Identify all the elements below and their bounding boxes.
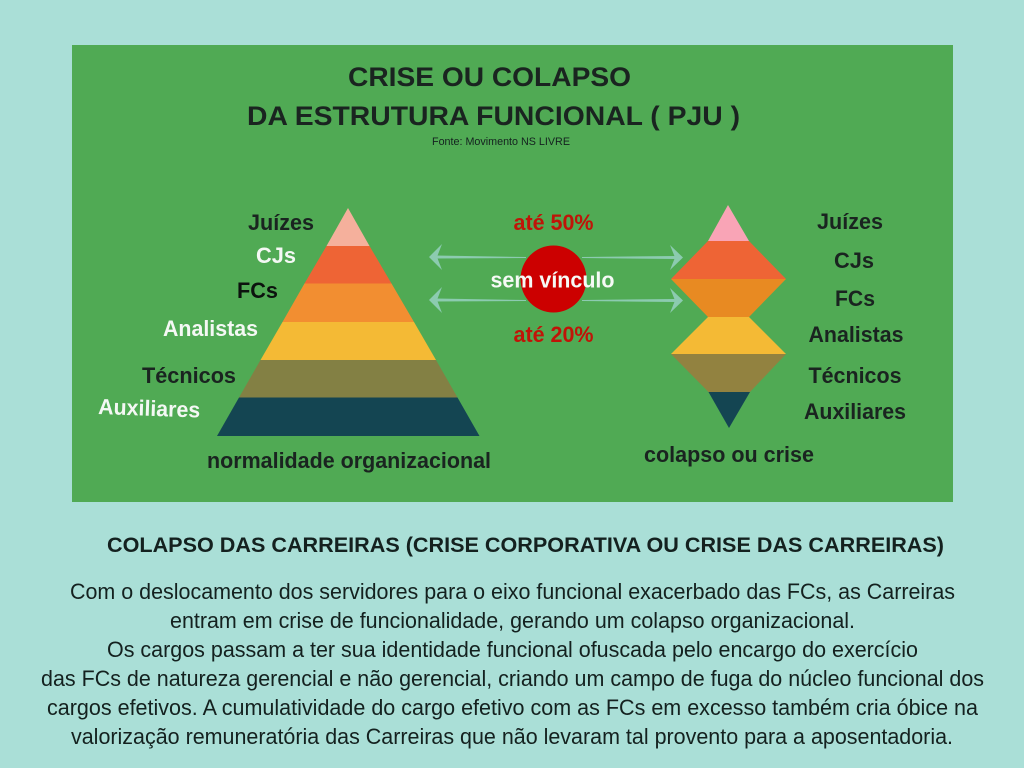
diamond labels [804, 209, 906, 424]
body text: Com o deslocamento dos servidores para o eixo funcional exacerbado das FCs, as Carreiras [70, 579, 955, 604]
body text: entram em crise de funcionalidade, gerando um colapso organizacional. [170, 608, 855, 633]
body text: Os cargos passam a ter sua identidade funcional ofuscada pelo encargo do exercício [107, 637, 918, 662]
chart: normal pyramid [217, 208, 480, 436]
diamond labels: Juízes [817, 209, 883, 234]
body text: cargos efetivos. A cumulatividade do cargo efetivo com as FCs em excesso também cria óbice na [47, 695, 979, 720]
title: CRISE OU COLAPSO [348, 62, 631, 92]
pyramid labels: Técnicos [142, 363, 236, 388]
body text: valorização remuneratória das Carreiras que não levaram tal provento para a aposentadoria. [71, 724, 953, 749]
source note: Fonte: Movimento NS LIVRE [432, 136, 570, 148]
label: sem vínculo: sem vínculo [490, 268, 614, 292]
body text: das FCs de natureza gerencial e não gerencial, criando um campo de fuga do núcleo funcional dos [41, 666, 984, 691]
diamond labels: Auxiliares [804, 399, 906, 424]
diamond labels: Analistas [808, 322, 904, 347]
body text [41, 579, 984, 749]
diamond caption: colapso ou crise [644, 442, 814, 467]
pyramid labels [98, 210, 314, 423]
diamond labels: FCs [835, 286, 875, 311]
diamond labels: CJs [834, 248, 874, 273]
label: até 20%: até 20% [514, 322, 594, 347]
title [247, 62, 740, 131]
circle: sem vínculo [520, 246, 586, 312]
pyramid labels: Analistas [163, 316, 258, 341]
label: até 50%: até 50% [514, 210, 594, 235]
panel: green diagram [72, 45, 953, 502]
diamond labels: Técnicos [808, 363, 902, 388]
pyramid labels: CJs [256, 243, 296, 268]
title: DA ESTRUTURA FUNCIONAL ( PJU ) [247, 101, 740, 131]
pyramid labels: FCs [237, 278, 278, 303]
chart: collapsed diamond stack [671, 205, 786, 428]
arrows: double-headed links [429, 244, 683, 313]
pyramid caption: normalidade organizacional [207, 448, 491, 473]
pyramid labels: Auxiliares [98, 394, 201, 423]
heading: colapso das carreiras: COLAPSO DAS CARREIRAS (CRISE CORPORATIVA OU CRISE DAS CARREIRAS) [107, 534, 944, 557]
pyramid labels: Juízes [248, 210, 314, 235]
